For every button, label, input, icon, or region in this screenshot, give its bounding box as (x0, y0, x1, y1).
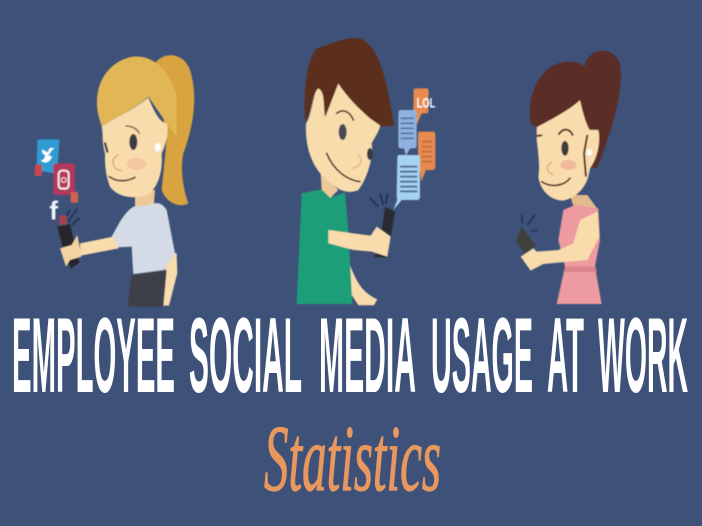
hair strand by ear (584, 135, 587, 177)
neck (570, 195, 598, 212)
illustration: woman in pink dress (516, 51, 621, 304)
badge: facebook notification (59, 215, 67, 225)
phone (374, 207, 395, 257)
facial lines (537, 130, 573, 185)
title: SOCIAL (189, 295, 302, 415)
arm and hand (521, 212, 599, 271)
earring (155, 143, 161, 152)
eye (561, 141, 569, 156)
hair (305, 38, 394, 127)
dress (557, 205, 602, 304)
arm and hand (328, 227, 391, 257)
blush (560, 160, 576, 170)
neck (135, 190, 155, 212)
hand (60, 235, 82, 267)
icon: twitter (37, 139, 59, 173)
skirt (127, 270, 167, 307)
face (537, 100, 599, 201)
badge: instagram notification (71, 192, 78, 203)
far eye (367, 148, 373, 160)
ponytail (155, 55, 194, 205)
tap sparks (370, 193, 387, 207)
hair bun (580, 51, 621, 168)
tap sparks (63, 208, 79, 225)
title: AT (547, 295, 584, 415)
icon: instagram (53, 163, 75, 195)
title: MEDIA (319, 295, 416, 415)
earring (587, 149, 592, 156)
phone (57, 224, 79, 269)
subtitle: Statistics (264, 407, 441, 511)
tap sparks (521, 215, 537, 231)
badge: twitter notification (35, 165, 42, 176)
eye (129, 134, 137, 150)
shirt (297, 189, 352, 304)
lower arm (349, 263, 377, 305)
title: EMPLOYEE (12, 295, 175, 415)
neck (321, 173, 338, 200)
bubble: LOL (413, 88, 436, 125)
eye (339, 124, 347, 140)
facial lines (327, 111, 361, 182)
bubble: light blue message (393, 155, 420, 210)
hair (530, 62, 600, 130)
bubble: LOL: LOL (417, 94, 436, 110)
dress waistband (564, 267, 597, 272)
blush (127, 158, 147, 170)
illustration: man with chat bubbles (297, 38, 436, 305)
lower right arm (162, 253, 177, 306)
bubble: periwinkle message (398, 110, 417, 156)
hair (97, 57, 177, 137)
icon: facebook f: f (49, 195, 58, 225)
forearm (80, 237, 119, 256)
illustration: blonde woman with social media icons (35, 55, 194, 307)
bubble: orange message (418, 132, 435, 182)
facial lines (105, 126, 139, 181)
blouse (112, 203, 175, 274)
face (102, 97, 168, 197)
face (306, 83, 381, 192)
phone (516, 227, 536, 253)
